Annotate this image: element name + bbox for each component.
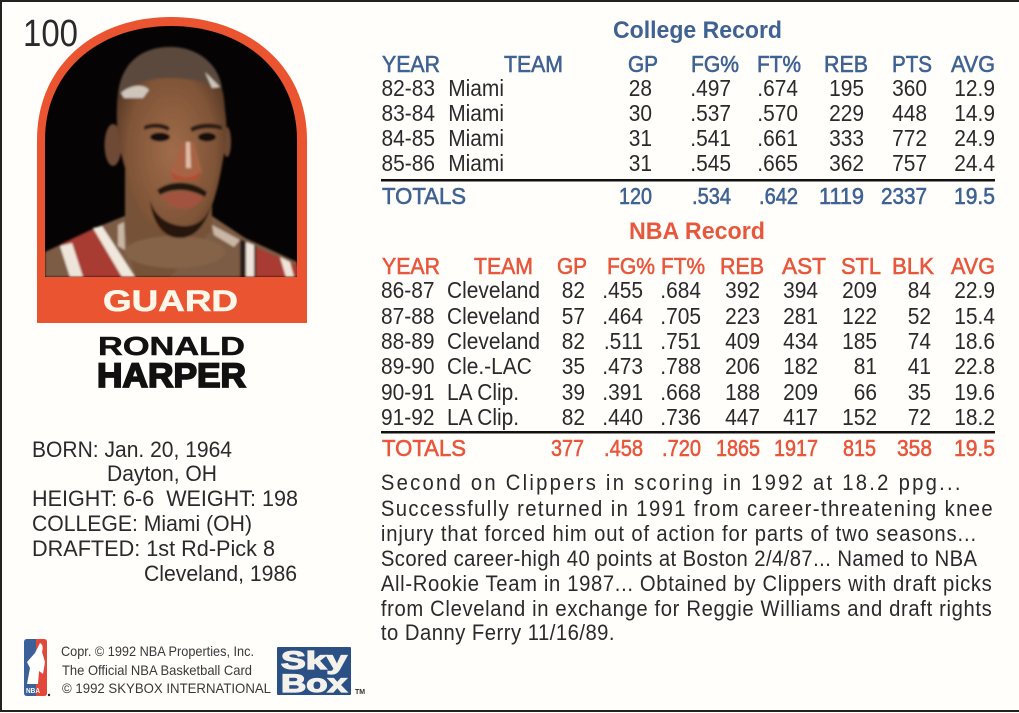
college data rows: 14.9 (954, 100, 995, 126)
college data rows: Miami (448, 100, 504, 126)
NBA data rows: 81 (854, 353, 877, 379)
NBA data rows: .455 (602, 277, 643, 303)
NBA data rows: Cleveland (447, 328, 540, 354)
icon: NBA logo (24, 639, 50, 696)
NBA data rows: 88-89 (381, 328, 434, 354)
college data rows: 448 (892, 100, 927, 126)
NBA data rows: .511 (604, 328, 643, 354)
NBA data rows: 74 (908, 328, 931, 354)
college data rows: .674 (757, 75, 798, 101)
NBA header row: TEAM (474, 253, 533, 279)
college data rows: 195 (829, 75, 864, 101)
NBA data rows: 87-88 (381, 303, 434, 329)
player bio: BORN: Jan. 20, 1964 (32, 437, 232, 462)
orange arch frame (37, 17, 307, 323)
NBA data rows: 52 (908, 303, 931, 329)
college header row: GP (628, 51, 658, 77)
NBA data rows: 417 (783, 404, 818, 430)
NBA data rows: .736 (660, 404, 701, 430)
NBA data rows: 22.9 (954, 277, 995, 303)
NBA data rows: 182 (783, 353, 818, 379)
NBA header row: FG% (607, 253, 655, 279)
player bio: HEIGHT: 6-6 WEIGHT: 198 (32, 486, 298, 511)
NBA data rows: 66 (854, 379, 877, 405)
NBA totals row: .720 (662, 435, 701, 461)
player bio: Dayton, OH (107, 461, 217, 486)
position label: GUARD (103, 285, 238, 318)
college data rows: 30 (629, 100, 652, 126)
college header row: FT% (757, 51, 801, 77)
NBA data rows: 35 (908, 379, 931, 405)
player biography paragraph: All-Rookie Team in 1987... Obtained by Clippers with draft picks (381, 572, 992, 596)
player biography paragraph: injury that forced him out of action for parts of two seasons... (381, 522, 976, 546)
NBA data rows: 409 (725, 328, 760, 354)
college header row: FG% (691, 51, 739, 77)
NBA data rows: LA Clip. (447, 379, 519, 405)
player biography paragraph: to Danny Ferry 11/16/89. (381, 621, 615, 645)
college data rows: .541 (690, 125, 731, 151)
NBA totals row: TOTALS (382, 435, 466, 461)
NBA data rows: .391 (602, 379, 643, 405)
college data rows: .661 (757, 125, 798, 151)
copyright text (61, 643, 271, 696)
NBA totals row: 1917 (774, 435, 818, 461)
player name: RONALD (98, 331, 245, 361)
college totals row: 2337 (881, 183, 927, 209)
player biography paragraph: from Cleveland in exchange for Reggie Williams and draft rights (381, 597, 992, 621)
NBA header row: AVG (951, 253, 995, 279)
NBA data rows: 91-92 (381, 404, 434, 430)
college data rows: .497 (690, 75, 731, 101)
NBA data rows: 18.6 (954, 328, 995, 354)
college record table (381, 51, 995, 209)
college data rows: .545 (690, 150, 731, 176)
NBA record table (381, 253, 995, 461)
college data rows: .665 (757, 150, 798, 176)
college data rows: 757 (892, 150, 927, 176)
NBA data rows: 86-87 (381, 277, 434, 303)
icon: SkyBox logo: Sky (281, 647, 347, 675)
NBA data rows: .705 (660, 303, 701, 329)
college data rows: .537 (690, 100, 731, 126)
NBA totals row (382, 435, 995, 461)
college data rows: .570 (757, 100, 798, 126)
college data rows: 31 (629, 125, 652, 151)
college data rows: 360 (892, 75, 927, 101)
NBA data rows: 447 (725, 404, 760, 430)
NBA data rows: 19.6 (954, 379, 995, 405)
player biography paragraph: Scored career-high 40 points at Boston 2/4/87... Named to NBA (381, 547, 978, 571)
NBA header row: REB (720, 253, 764, 279)
table heading: NBA Record: NBA Record (629, 218, 765, 245)
NBA data rows: 152 (842, 404, 877, 430)
icon: NBA logo: NBA (26, 688, 40, 695)
NBA data rows: .668 (660, 379, 701, 405)
NBA data rows: 82 (562, 277, 585, 303)
player photo (45, 47, 298, 277)
NBA totals row: .458 (604, 435, 643, 461)
player bio: Cleveland, 1986 (144, 561, 297, 586)
college header row: AVG (951, 51, 995, 77)
NBA data rows: 281 (783, 303, 818, 329)
NBA totals row: 815 (843, 435, 876, 461)
NBA data rows: 41 (908, 353, 931, 379)
NBA data rows: 84 (908, 277, 931, 303)
college data rows: 82-83 (382, 75, 435, 101)
NBA data rows: 392 (725, 277, 760, 303)
NBA data rows: 434 (783, 328, 818, 354)
college header row: PTS (892, 51, 932, 77)
college totals row: 120 (619, 183, 652, 209)
NBA data rows: 90-91 (381, 379, 434, 405)
player bio: COLLEGE: Miami (OH) (32, 511, 252, 536)
icon: SkyBox logo: Box (281, 670, 347, 698)
college data rows: Miami (448, 125, 504, 151)
NBA data rows: 394 (783, 277, 818, 303)
NBA data rows: 82 (562, 404, 585, 430)
college data rows: 229 (829, 100, 864, 126)
college data rows: Miami (448, 150, 504, 176)
NBA data rows: .464 (602, 303, 643, 329)
NBA data rows: Cleveland (447, 303, 540, 329)
player name (97, 331, 246, 395)
card number: 100 (23, 13, 78, 55)
college data rows: Miami (448, 75, 504, 101)
NBA data rows: 185 (842, 328, 877, 354)
NBA data rows: Cleveland (447, 277, 540, 303)
NBA data rows: 22.8 (954, 353, 995, 379)
NBA data rows: Cle.-LAC (447, 353, 532, 379)
college data rows: 28 (629, 75, 652, 101)
NBA data rows: 223 (725, 303, 760, 329)
NBA data rows: 209 (842, 277, 877, 303)
college header row (382, 51, 995, 77)
college data rows: 362 (829, 150, 864, 176)
NBA data rows: 15.4 (954, 303, 995, 329)
icon: SkyBox logo (277, 647, 365, 698)
college totals row: 19.5 (954, 183, 995, 209)
college data rows (382, 75, 995, 176)
NBA totals row: 19.5 (954, 435, 995, 461)
college data rows: 84-85 (382, 125, 435, 151)
NBA data rows: .788 (660, 353, 701, 379)
NBA header row (382, 253, 995, 279)
college data rows: 333 (829, 125, 864, 151)
NBA data rows: 57 (562, 303, 585, 329)
college totals row: .534 (692, 183, 731, 209)
NBA data rows: 209 (783, 379, 818, 405)
copyright text: © 1992 SKYBOX INTERNATIONAL (62, 680, 271, 696)
college header row: REB (824, 51, 868, 77)
NBA data rows: .751 (660, 328, 701, 354)
NBA totals row: 358 (897, 435, 932, 461)
college data rows: 31 (629, 150, 652, 176)
college data rows: 24.4 (954, 150, 995, 176)
NBA data rows: 206 (725, 353, 760, 379)
college data rows: 83-84 (382, 100, 435, 126)
player biography paragraph (381, 471, 993, 645)
NBA header row: AST (782, 253, 826, 279)
player portrait panel (37, 17, 307, 323)
college data rows: 12.9 (954, 75, 995, 101)
college header row: TEAM (504, 51, 563, 77)
NBA data rows: 72 (908, 404, 931, 430)
NBA totals row: 1865 (716, 435, 760, 461)
black photo background (45, 26, 297, 277)
college data rows: 85-86 (382, 150, 435, 176)
player biography paragraph: Successfully returned in 1991 from career-threatening knee (381, 497, 993, 521)
NBA data rows: 39 (562, 379, 585, 405)
NBA data rows: 188 (725, 379, 760, 405)
NBA data rows: LA Clip. (447, 404, 519, 430)
NBA data rows: .684 (660, 277, 701, 303)
college data rows: 772 (892, 125, 927, 151)
NBA header row: FT% (661, 253, 705, 279)
player bio: DRAFTED: 1st Rd-Pick 8 (32, 536, 275, 561)
copyright text: The Official NBA Basketball Card (62, 662, 252, 678)
player biography paragraph: Second on Clippers in scoring in 1992 at 18.2 ppg... (381, 471, 960, 495)
college totals row (382, 183, 995, 209)
NBA data rows: .440 (602, 404, 643, 430)
college data rows: 24.9 (954, 125, 995, 151)
college totals row: TOTALS (382, 183, 466, 209)
NBA data rows: .473 (602, 353, 643, 379)
NBA header row: STL (841, 253, 881, 279)
NBA header row: GP (557, 253, 587, 279)
college totals row: 1119 (819, 183, 864, 209)
NBA data rows (381, 277, 995, 430)
player bio (32, 437, 298, 586)
college totals row: .642 (759, 183, 798, 209)
NBA totals row: 377 (551, 435, 584, 461)
player name: HARPER (97, 357, 246, 395)
NBA header row: YEAR (382, 253, 440, 279)
copyright text: Copr. © 1992 NBA Properties, Inc. (61, 643, 254, 659)
NBA data rows: 82 (562, 328, 585, 354)
NBA data rows: 35 (562, 353, 585, 379)
NBA data rows: 122 (842, 303, 877, 329)
NBA data rows: 18.2 (954, 404, 995, 430)
college header row: YEAR (382, 51, 440, 77)
NBA header row: BLK (892, 253, 935, 279)
table heading: College Record: College Record (613, 17, 782, 44)
NBA data rows: 89-90 (381, 353, 434, 379)
icon: SkyBox logo: TM (355, 689, 365, 696)
